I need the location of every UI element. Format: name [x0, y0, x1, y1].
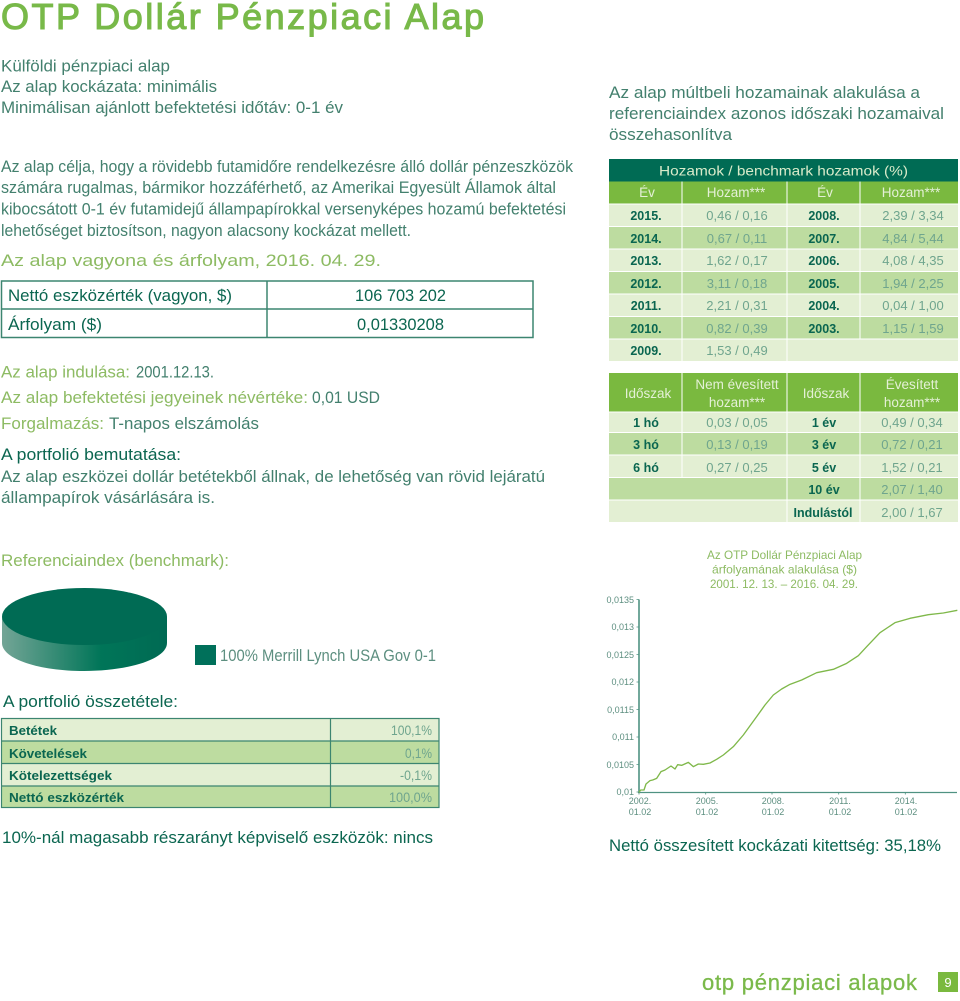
fund objective paragraph: lehetőséget biztosítson, nagyon alacsony kockázat mellett.	[1, 222, 411, 240]
portfolio composition table: Kötelezettségek	[9, 768, 113, 783]
fund details: Forgalmazás:	[1, 415, 104, 433]
x axis labels: 01.02	[762, 807, 784, 817]
annual returns table: Hozamok / benchmark hozamok (%)	[659, 162, 908, 178]
price line	[639, 610, 957, 792]
period returns table	[609, 373, 958, 522]
period returns table: 6 hó	[633, 461, 659, 475]
x axis labels: 2014.	[895, 796, 917, 806]
footer brand text: otp pénzpiaci alapok	[702, 970, 918, 995]
portfolio composition table: 100,1%	[391, 723, 432, 738]
annual returns table: 0,67 / 0,11	[707, 231, 767, 246]
period returns table: 10 év	[808, 483, 840, 497]
x axis labels: 01.02	[629, 807, 651, 817]
period returns table: 0,03 / 0,05	[706, 415, 768, 430]
annual returns table: 2006.	[808, 254, 840, 268]
fund objective paragraph: számára rugalmas, bármikor hozzáférhető, az Amerikai Egyesült Államok által	[1, 178, 556, 197]
portfolio description: A portfolió bemutatása:	[1, 446, 181, 464]
annual returns table: 4,08 / 4,35	[882, 253, 944, 268]
price chart title	[707, 548, 862, 591]
annual returns table: 2,21 / 0,31	[706, 298, 768, 313]
annual returns table: 1,15 / 1,59	[882, 321, 944, 336]
annual returns table: 2011.	[631, 299, 661, 313]
period returns table: 2,00 / 1,67	[881, 505, 943, 520]
fund details: T-napos elszámolás	[109, 415, 259, 433]
annual returns table: 2012.	[630, 277, 662, 291]
y axis labels: 0,0135	[606, 595, 634, 605]
returns table heading	[609, 84, 944, 144]
portfolio composition table: Nettó eszközérték	[9, 790, 125, 805]
portfolio composition table: 100,0%	[389, 790, 432, 805]
period returns table: hozam***	[884, 395, 941, 410]
fund summary text block	[1, 58, 344, 117]
x axis labels: 2005.	[696, 796, 718, 806]
y axis labels: 0,013	[611, 622, 634, 632]
period returns table: 3 hó	[633, 438, 659, 452]
fund summary text block: Az alap kockázata: minimális	[1, 78, 217, 96]
period returns table: Indulástól	[793, 506, 853, 520]
benchmark legend: 100% Merrill Lynch USA Gov 0-1	[220, 647, 436, 665]
portfolio composition table: -0,1%	[400, 768, 432, 783]
y axis labels: 0,0125	[606, 650, 634, 660]
annual returns table: 2,39 / 3,34	[882, 208, 944, 223]
portfolio composition table: 0,1%	[405, 746, 432, 761]
returns table heading: összehasonlítva	[609, 126, 733, 144]
period returns table: Időszak	[803, 386, 850, 401]
price chart title: 2001. 12. 13. – 2016. 04. 29.	[710, 577, 858, 591]
x axis labels: 01.02	[696, 807, 718, 817]
annual returns table: 2003.	[808, 322, 840, 336]
assets and price heading: Az alap vagyona és árfolyam, 2016. 04. 29.	[1, 252, 381, 270]
portfolio composition table	[2, 718, 439, 808]
page number: 9	[944, 975, 952, 990]
portfolio description	[1, 446, 545, 507]
period returns table: 0,72 / 0,21	[881, 437, 943, 452]
period returns table: 0,13 / 0,19	[706, 437, 768, 452]
note on assets above 10 percent: 10%-nál magasabb részarányt képviselő eszközök: nincs	[2, 828, 433, 847]
annual returns table: 0,04 / 1,00	[882, 298, 944, 313]
y axis labels: 0,0105	[606, 760, 634, 770]
portfolio composition table: Betétek	[9, 723, 58, 738]
portfolio composition table: Követelések	[9, 746, 88, 761]
fund details: 2001.12.13.	[136, 364, 214, 382]
annual returns table: 2010.	[630, 322, 662, 336]
annual returns table: 2008.	[808, 209, 840, 223]
x axis labels: 2008.	[762, 796, 784, 806]
period returns table: Nem évesített	[695, 377, 779, 392]
period returns table: 1,52 / 0,21	[881, 460, 943, 475]
price chart title: árfolyamának alakulása ($)	[712, 562, 857, 576]
fund details: Az alap indulása:	[1, 364, 130, 382]
fund summary text block: Minimálisan ajánlott befektetési időtáv: 0-1 év	[1, 99, 344, 117]
x axis labels: 01.02	[895, 807, 917, 817]
fund objective paragraph	[1, 158, 574, 240]
fund summary text block: Külföldi pénzpiaci alap	[1, 58, 170, 76]
y axis labels: 0,012	[611, 677, 634, 687]
annual returns table: 2009.	[630, 344, 662, 358]
net asset value table: Árfolyam ($)	[8, 315, 102, 334]
annual returns table: Hozam***	[882, 185, 941, 200]
annual returns table: Év	[817, 185, 833, 200]
net asset value table	[2, 281, 533, 338]
period returns table: Időszak	[625, 386, 672, 401]
annual returns table: 0,46 / 0,16	[706, 208, 768, 223]
period returns table: 2,07 / 1,40	[881, 482, 943, 497]
x axis labels	[629, 796, 917, 817]
net risk exposure note: Nettó összesített kockázati kitettség: 35,18%	[609, 836, 941, 855]
annual returns table: 2007.	[808, 232, 840, 246]
annual returns table: 1,62 / 0,17	[706, 253, 768, 268]
period returns table: 1 hó	[633, 416, 659, 430]
annual returns table: 2005.	[808, 277, 840, 291]
x axis labels: 2011.	[829, 796, 851, 806]
fund details: Az alap befektetési jegyeinek névértéke:	[1, 389, 308, 407]
annual returns table: Hozam***	[707, 185, 766, 200]
y axis labels	[606, 595, 634, 797]
y axis labels: 0,01	[616, 787, 634, 797]
x axis labels: 01.02	[829, 807, 851, 817]
portfolio description: állampapírok vásárlására is.	[1, 489, 215, 507]
y axis labels: 0,011	[612, 732, 634, 742]
net asset value table: 106 703 202	[355, 287, 446, 305]
y axis labels: 0,0115	[607, 705, 634, 715]
fund objective paragraph: Az alap célja, hogy a rövidebb futamidőre rendelkezésre álló dollár pénzeszközök	[1, 158, 574, 176]
annual returns table: 1,53 / 0,49	[706, 343, 768, 358]
period returns table: Évesített	[886, 377, 939, 392]
returns table heading: referenciaindex azonos időszaki hozamaival	[609, 105, 944, 123]
period returns table: 0,49 / 0,34	[881, 415, 943, 430]
period returns table: 5 év	[812, 461, 836, 475]
annual returns table: 2004.	[808, 299, 840, 313]
period returns table: 3 év	[812, 438, 836, 452]
annual returns table: 0,82 / 0,39	[706, 321, 768, 336]
annual returns table: 4,84 / 5,44	[882, 231, 944, 246]
portfolio description: Az alap eszközei dollár betétekből állnak, de lehetőség van rövid lejáratú	[1, 468, 545, 486]
x axis labels: 2002.	[629, 796, 651, 806]
portfolio composition heading: A portfolió összetétele:	[3, 693, 178, 711]
period returns table: 0,27 / 0,25	[706, 460, 768, 475]
benchmark heading: Referenciaindex (benchmark):	[1, 552, 229, 570]
page number	[938, 972, 958, 992]
line chart: fund price	[606, 595, 957, 817]
period returns table: hozam***	[709, 395, 766, 410]
period returns table: 1 év	[812, 416, 836, 430]
pie chart: benchmark	[2, 588, 167, 671]
annual returns table: Év	[639, 185, 655, 200]
annual returns table: 2013.	[630, 254, 662, 268]
annual returns table: 3,11 / 0,18	[707, 276, 767, 291]
axes	[636, 600, 957, 794]
annual returns table: 2014.	[630, 232, 662, 246]
annual returns table	[609, 159, 958, 361]
net asset value table: 0,01330208	[357, 316, 444, 334]
fund details	[1, 364, 380, 433]
fund objective paragraph: kibocsátott 0-1 év futamidejű állampapírokkal versenyképes hozamú befektetési	[1, 200, 566, 218]
annual returns table: 2015.	[630, 209, 662, 223]
net asset value table: Nettó eszközérték (vagyon, $)	[8, 287, 232, 305]
returns table heading: Az alap múltbeli hozamainak alakulása a	[609, 84, 921, 102]
fund details: 0,01 USD	[312, 389, 380, 407]
annual returns table: 1,94 / 2,25	[882, 276, 944, 291]
price chart title: Az OTP Dollár Pénzpiaci Alap	[707, 548, 862, 562]
